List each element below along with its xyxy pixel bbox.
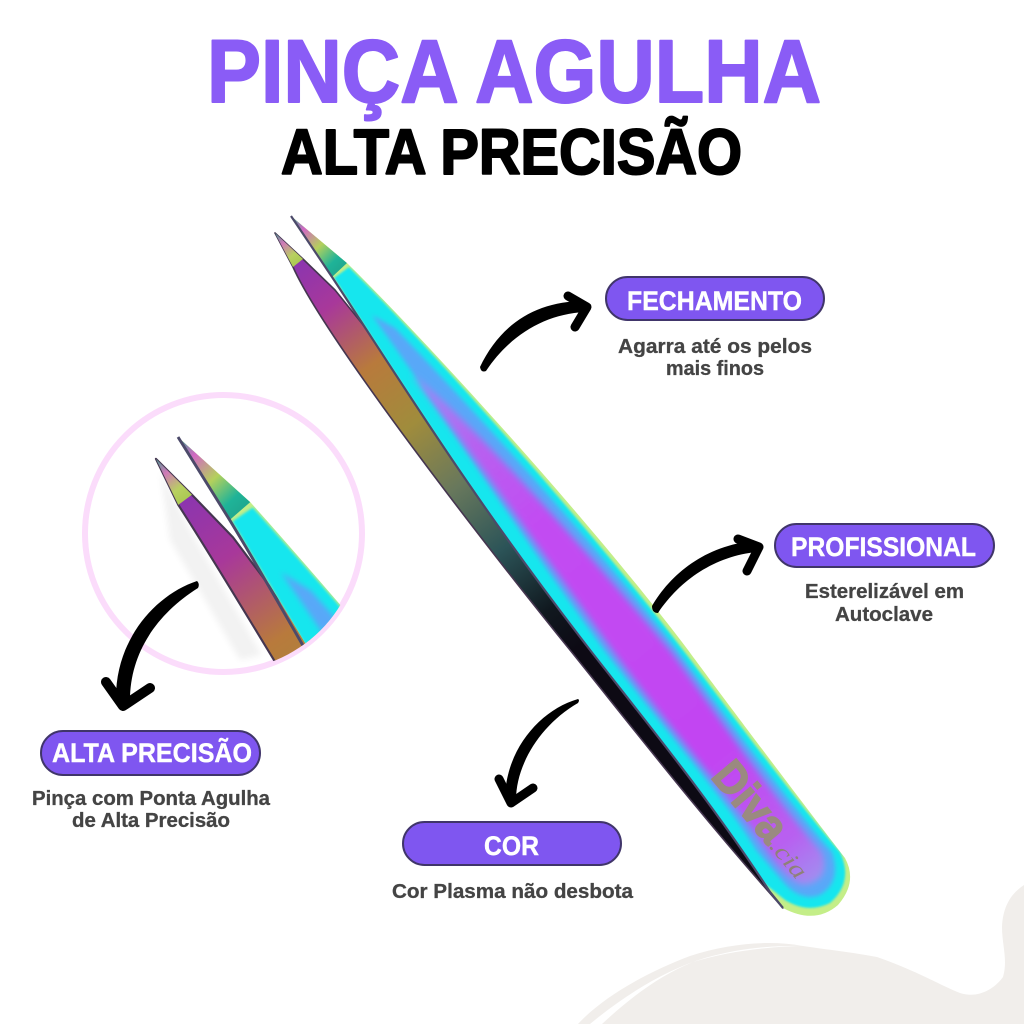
- subtitle: ALTA PRECISÃO: ALTA PRECISÃO: [281, 116, 742, 188]
- back arm: [275, 233, 783, 908]
- callout: COR: COR: [484, 831, 539, 861]
- zoom circle with tweezer tip detail: [82, 392, 365, 675]
- logo on handle: Diva: [702, 750, 800, 853]
- callout: PROFISSIONAL: [775, 524, 994, 626]
- arrow: to ALTA PRECISÃO: [106, 581, 199, 706]
- front arm: [280, 200, 870, 930]
- arrow: to PROFISSIONAL: [652, 539, 759, 613]
- callout: COR: [392, 822, 634, 903]
- callout: ALTA PRECISÃO: Pinça com Ponta Agulha: [32, 788, 271, 810]
- back arm tip: [275, 233, 303, 267]
- callout: COR: Cor Plasma não desbota: [392, 881, 634, 903]
- callout: ALTA PRECISÃO: de Alta Precisão: [72, 810, 230, 832]
- front arm inner edge: [291, 216, 783, 908]
- callout: ALTA PRECISÃO: [32, 731, 271, 832]
- callout: PROFISSIONAL: Autoclave: [835, 604, 933, 626]
- callout: ALTA PRECISÃO: ALTA PRECISÃO: [52, 738, 252, 768]
- logo on handle: [702, 750, 829, 887]
- callout: FECHAMENTO: mais finos: [666, 358, 764, 380]
- callout: FECHAMENTO: Agarra até os pelos: [618, 336, 812, 358]
- callout: PROFISSIONAL: PROFISSIONAL: [791, 532, 976, 562]
- main tweezers image: [275, 200, 870, 930]
- arrow: to COR: [499, 699, 579, 803]
- logo on handle: .cia: [764, 834, 812, 884]
- title: PINÇA AGULHA: PINÇA AGULHA: [207, 21, 821, 121]
- arrow: to FECHAMENTO: [480, 296, 587, 372]
- callout: PROFISSIONAL: Esterelizável em: [805, 581, 964, 603]
- decorative background blob: [578, 885, 1024, 1024]
- callout: FECHAMENTO: FECHAMENTO: [627, 286, 802, 316]
- callout: FECHAMENTO: [606, 277, 824, 380]
